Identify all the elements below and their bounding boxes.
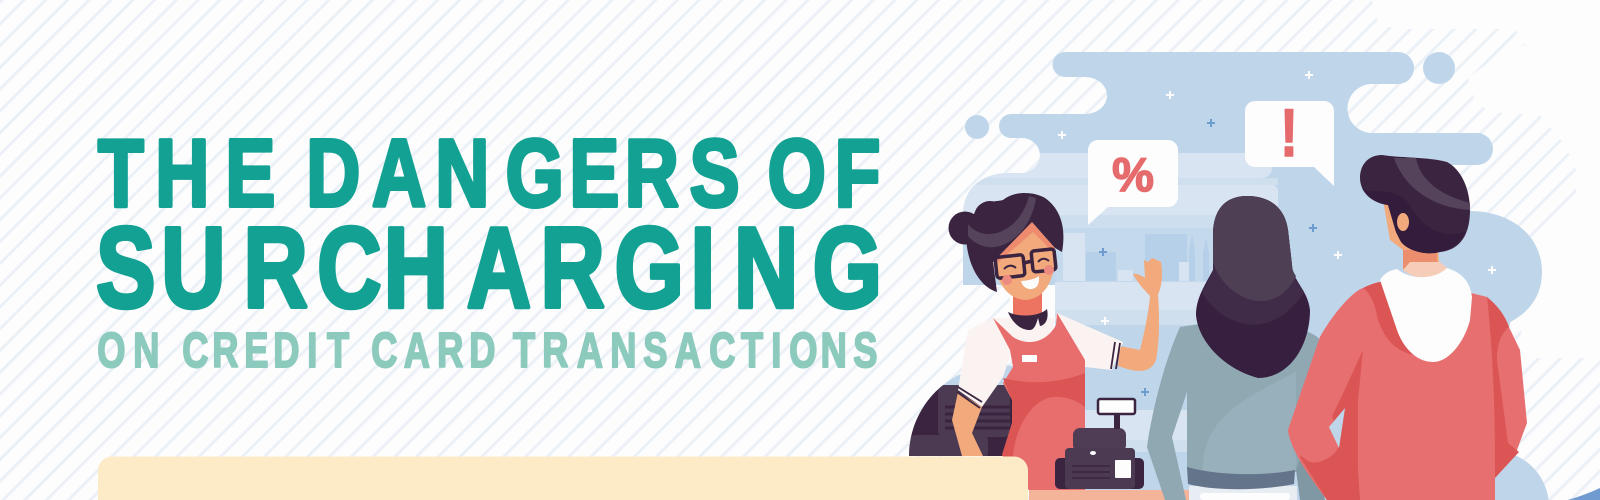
right arm and hand — [1118, 258, 1162, 371]
speech bubble: percent — [1088, 140, 1178, 225]
ear — [974, 258, 994, 278]
sweater lighter body — [1203, 372, 1296, 475]
smile — [1021, 276, 1039, 289]
hair — [966, 193, 1063, 292]
forehead shade — [993, 222, 1055, 264]
pants — [1189, 486, 1297, 500]
dark bag behind cashier — [909, 385, 1012, 456]
subtitle: ON CREDIT CARD TRANSACTIONS — [97, 324, 877, 378]
cloud backdrop — [909, 52, 1549, 500]
collar — [1008, 309, 1048, 330]
hair mid layer — [1202, 196, 1304, 325]
sweater — [1147, 320, 1320, 500]
dress — [993, 313, 1085, 490]
glasses — [988, 249, 1056, 278]
dress shadow — [1002, 373, 1085, 490]
hoodie body — [1288, 280, 1527, 500]
waistband — [1187, 467, 1295, 489]
hair highlight — [1394, 158, 1470, 210]
man customer from behind — [1288, 155, 1527, 500]
hair — [1196, 196, 1310, 378]
blouse — [958, 313, 1123, 407]
speech bubble: percent: % — [1112, 148, 1154, 201]
hair bun — [948, 212, 982, 244]
dress belly — [1013, 397, 1085, 490]
counter — [1029, 490, 1199, 500]
title line 2: SURCHARGING — [96, 203, 882, 332]
arm gap — [1329, 408, 1345, 448]
city skyline — [1063, 232, 1209, 281]
hood — [1380, 268, 1472, 362]
hair top layer — [1213, 196, 1296, 301]
hair highlight — [968, 196, 1036, 247]
hoodie shadows — [1363, 282, 1413, 355]
far sleeve — [1296, 430, 1325, 500]
shirt collar shade — [1403, 262, 1447, 278]
neck — [1383, 200, 1440, 280]
yellow panel — [98, 456, 1028, 500]
sleeve stripes — [957, 342, 1120, 408]
face — [993, 222, 1055, 300]
cheeks — [1002, 275, 1012, 285]
left arm — [952, 392, 983, 456]
neck — [1013, 290, 1042, 318]
sparkle plus signs — [1058, 71, 1496, 396]
ear — [1397, 213, 1409, 231]
title line 1: THE DANGERS OF — [98, 120, 880, 227]
hair — [1360, 155, 1470, 253]
title — [96, 120, 882, 378]
name badge — [1022, 355, 1037, 362]
speech bubble: exclamation — [1245, 95, 1334, 186]
woman customer from behind — [1147, 196, 1325, 500]
hair lower shadow — [1362, 188, 1465, 253]
speech bubble: exclamation: ! — [1280, 95, 1298, 171]
cash register — [1055, 399, 1144, 489]
cashier woman — [948, 193, 1162, 490]
bottom right corner accent — [1568, 488, 1600, 500]
closed eyes — [1004, 259, 1049, 269]
